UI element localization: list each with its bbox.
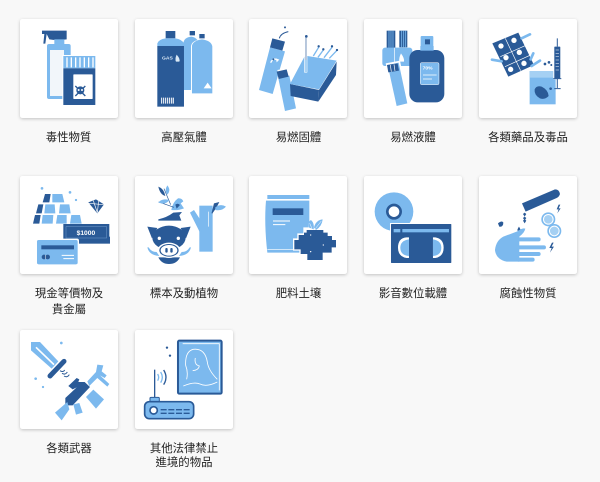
icon: pills and syringe <box>492 33 561 104</box>
panel: 現金等價物及貴金屬 <box>20 176 118 316</box>
icon: sword and rifle <box>31 342 109 420</box>
label: 標本及動植物: 標本及動植物 <box>150 286 218 300</box>
panel: 高壓氣體 <box>135 19 233 144</box>
icon: gas cylinders: GAS <box>162 55 173 61</box>
icon: boar, bird and tree <box>147 185 226 264</box>
panel: 影音數位載體 <box>364 176 462 300</box>
label: 易燃液體: 易燃液體 <box>390 130 436 144</box>
icon: disc and video tape <box>375 192 452 264</box>
panel: 各類藥品及毒品 <box>479 19 577 144</box>
label: 易燃固體: 易燃固體 <box>276 131 321 144</box>
panel: 易燃固體 <box>249 19 347 144</box>
label: 影音數位載體: 影音數位載體 <box>379 286 447 300</box>
label: 肥料土壤: 肥料土壤 <box>276 286 321 300</box>
label: 其他法律禁止進境的物品: 其他法律禁止 <box>150 441 218 455</box>
panel: 現金等價物及貴金屬: 貴金屬 <box>52 302 86 316</box>
panel: 腐蝕性物質 <box>479 176 577 300</box>
panel: 毒性物質 <box>20 19 118 144</box>
panel: 其他法律禁止進境的物品: 進境的物品 <box>156 455 212 469</box>
panel: 各類武器 <box>20 330 118 455</box>
icon: spray bottle and poison jar <box>42 31 96 106</box>
panel: 肥料土壤 <box>249 176 347 300</box>
icon: painting and router <box>145 341 222 419</box>
panel: 易燃液體 <box>364 19 462 144</box>
panel: 標本及動植物 <box>135 176 233 300</box>
icon: fertilizer bag and soil <box>265 195 337 261</box>
label: 毒性物質: 毒性物質 <box>46 130 91 144</box>
icon: lighter and spray bottle: 70% <box>423 65 433 71</box>
panel: 其他法律禁止進境的物品 <box>135 330 233 469</box>
label: 腐蝕性物質: 腐蝕性物質 <box>500 286 556 300</box>
icon: acid tube, coins and hand <box>495 189 561 262</box>
label: 高壓氣體: 高壓氣體 <box>161 130 207 144</box>
label: 各類藥品及毒品: 各類藥品及毒品 <box>488 130 568 144</box>
label: 現金等價物及貴金屬: 現金等價物及 <box>35 286 103 300</box>
icon: gold bars, diamond, cash and card: $1000 <box>77 230 95 237</box>
label: 各類武器: 各類武器 <box>46 441 92 455</box>
icon: firecrackers and matches <box>259 26 338 112</box>
